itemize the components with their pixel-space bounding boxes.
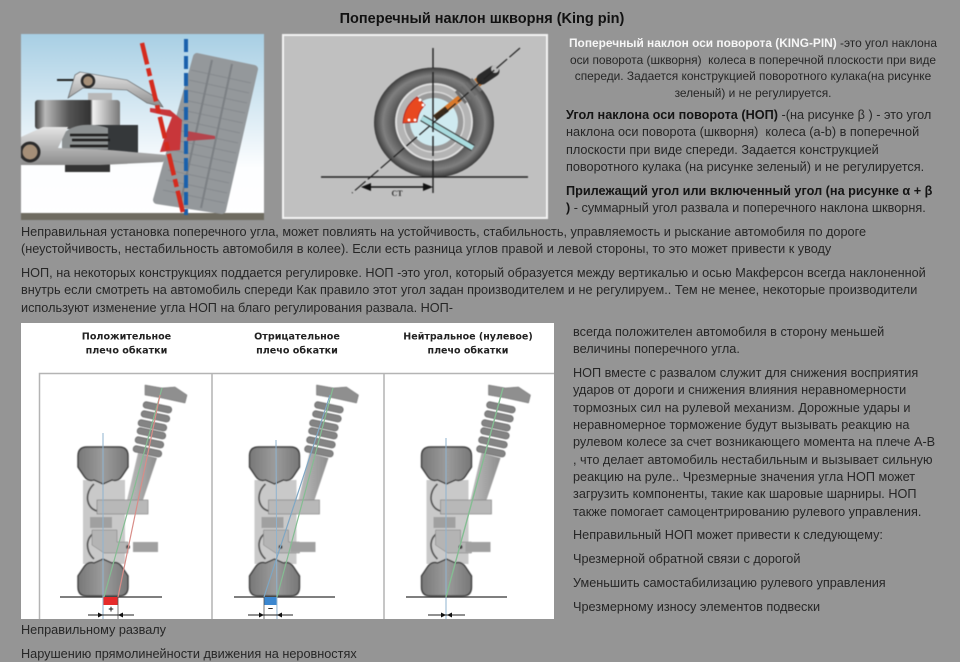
red steering knuckle [150,108,215,152]
image: wheel scheme with scrub radius [282,34,548,220]
title: Поперечный наклон шкворня (King pin) [340,11,624,27]
heading: negative scrub: плечо обкатки [256,344,338,356]
right text: included angle [566,184,932,215]
right text: steering axis angle: плоскости при виде спереди. Задается конструкцией [566,143,879,157]
right text: purpose of the angle: тормозных сил на рулевой механизм. Дорожные удары и [573,401,910,415]
image: front suspension with king pin axis [20,34,264,220]
right text: king-pin definition: зеленый) и не регулируется. [675,86,831,100]
right text: steering axis angle: поворотного кулака (на рисунке зеленый) и не регулируется. [566,160,924,174]
right text: steering axis angle: Угол наклона оси поворота (НОП) -(на рисунке β ) - это угол [566,108,931,122]
right text: purpose of the angle: НОП вместе с развалом служит для снижения восприятия [573,366,918,380]
right text: king-pin definition: оси поворота (шкворня) колеса в поперечной плоскости при виде [570,53,936,67]
right text: steering axis angle: наклона оси поворота (шкворня) колеса (a-b) в поперечной [566,125,919,139]
right text: included angle: Прилежащий угол или включенный угол (на рисунке α + β [566,184,932,198]
right text: purpose of the angle: неравномерное торможение будут вызывать реакцию на [573,418,909,432]
text: incorrect installation [21,225,866,256]
lower control arm [21,127,167,165]
wheel and strut: neutral [422,385,530,596]
wheel and strut: negative [250,385,358,596]
right text: consequence 1: Чрезмерной обратной связи с дорогой [573,552,800,566]
diagram: scrub radius comparison [21,323,554,619]
right text: king-pin definition: спереди. Задается конструкцией поворотного кулака(на рисунке [575,69,931,83]
right text: purpose of the angle: , что делает автомобиль нестабильным и вызывает сильную [573,453,933,467]
heading: neutral scrub: плечо обкатки [428,346,508,356]
red king pin axis [142,43,183,213]
right text: purpose of the angle: рулевом колесе за счет возникающего момента на плече А-В [573,435,935,449]
axis lines and offset: negative [234,388,335,619]
text: incorrect installation: Неправильная установка поперечного угла, может повлиять на устойчивость, стабильность, управляемость и рыскание автомобиля по дороге [21,225,866,239]
axis lines [321,48,528,193]
axis lines and offset: negative: – [268,603,273,613]
right text: included angle: ) - суммарный угол развала и поперечного наклона шкворня. [566,201,926,215]
right text: continuation: всегда положителен автомобиля в сторону меньшей [573,325,884,339]
text: adjustment: НОП, на некоторых конструкциях поддается регулировке. НОП -это угол, который образуется между вертикалью и осью Макферсон всегда наклоненной [21,266,926,280]
right text: steering axis angle [566,108,931,174]
wheel and strut: positive [78,385,187,596]
right text: consequence 2: Уменьшить самостабилизацию рулевого управления [573,576,886,590]
dimension arrow [361,183,433,191]
right text: king-pin definition [569,36,937,100]
upper control arm [57,72,163,107]
right text: purpose of the angle: также помогает самоцентрированию рулевого управления. [573,505,921,519]
shock body and spring [35,93,138,172]
tyre [157,57,254,210]
axis lines and offset: positive [60,388,162,619]
right text: consequence 3: Чрезмерному износу элементов подвески [573,600,820,614]
heading: negative scrub: Отрицательное [254,332,340,342]
text: consequence 5: Нарушению прямолинейности движения на неровностях [21,647,357,661]
right text: purpose of the angle [573,366,935,519]
blue vertical line [184,39,188,215]
axis lines and offset: positive: + [108,604,114,614]
heading: positive scrub: Положительное [82,332,172,342]
right text: purpose of the angle: загрузить компоненты, такие как шаровые шарниры. НОП [573,487,917,501]
right text: purpose of the angle: ударов от дороги и снижения влияния неравномерности [573,383,906,397]
right text: consequences intro: Неправильный НОП может привести к следующему: [573,528,883,542]
strut with spring and mount [422,65,499,148]
right text: purpose of the angle: реакцию на руле.. Чрезмерные значения угла НОП может [573,470,915,484]
text: incorrect installation: (неустойчивость, нестабильность автомобиля в колее). Если есть разница углов правой и левой стороны, то это может привести к уводу [21,242,831,256]
text: adjustment: внутрь если смотреть на автомобиль спереди Как правило этот угол задан производителем и не регулируем.. Тем не менее, некоторые производители [21,283,917,297]
heading: neutral scrub: Нейтральное (нулевое) [403,332,533,342]
right text: continuation: величины поперечного угла. [573,342,740,356]
heading: positive scrub: плечо обкатки [86,344,167,356]
brake caliper [403,97,425,123]
axis lines and offset: neutral [406,388,507,619]
text: consequence 4: Неправильному развалу [21,623,166,637]
wheel [374,68,494,178]
dimension label: СТ [391,189,403,198]
text: adjustment [21,266,926,315]
right text: king-pin definition: Поперечный наклон оси поворота (KING-PIN) -это угол наклона [569,36,937,50]
text: adjustment: используют изменение угла НОП на благо регулирования развала. НОП- [21,301,453,315]
right text: continuation [573,325,884,356]
